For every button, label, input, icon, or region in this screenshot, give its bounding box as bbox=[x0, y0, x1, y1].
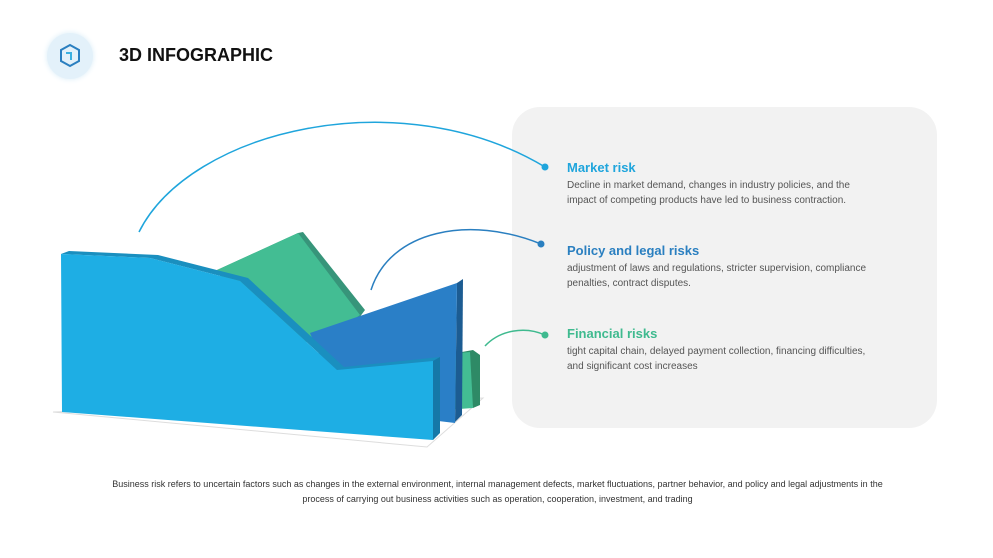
text: financial risk bbox=[567, 326, 865, 372]
footer text: Business risk refers to uncertain factors such as changes in the external environment, internal management defects, market fluctuations, partner behavior, and policy and legal adjustments in the process of carrying out business activities such as operation, cooperation, investment, and trading bbox=[112, 479, 883, 504]
text: market risk bbox=[567, 160, 850, 206]
text: financial risk: Financial risks bbox=[567, 326, 657, 341]
title: 3D INFOGRAPHIC bbox=[119, 45, 273, 65]
panel: risk descriptions bbox=[512, 107, 937, 428]
text: policy risk: Policy and legal risks bbox=[567, 243, 699, 258]
text: financial risk: tight capital chain, delayed payment collection, financing difficulties, and significant cost increases bbox=[567, 346, 865, 372]
text: market risk: Market risk bbox=[567, 160, 636, 175]
text: market risk: Decline in market demand, changes in industry policies, and the impact of competing products have led to business contraction. bbox=[567, 180, 850, 206]
text: policy risk bbox=[567, 243, 866, 288]
text: policy risk: adjustment of laws and regulations, stricter supervision, compliance penalties, contract disputes. bbox=[567, 263, 866, 288]
icon: cube badge bbox=[47, 33, 93, 79]
